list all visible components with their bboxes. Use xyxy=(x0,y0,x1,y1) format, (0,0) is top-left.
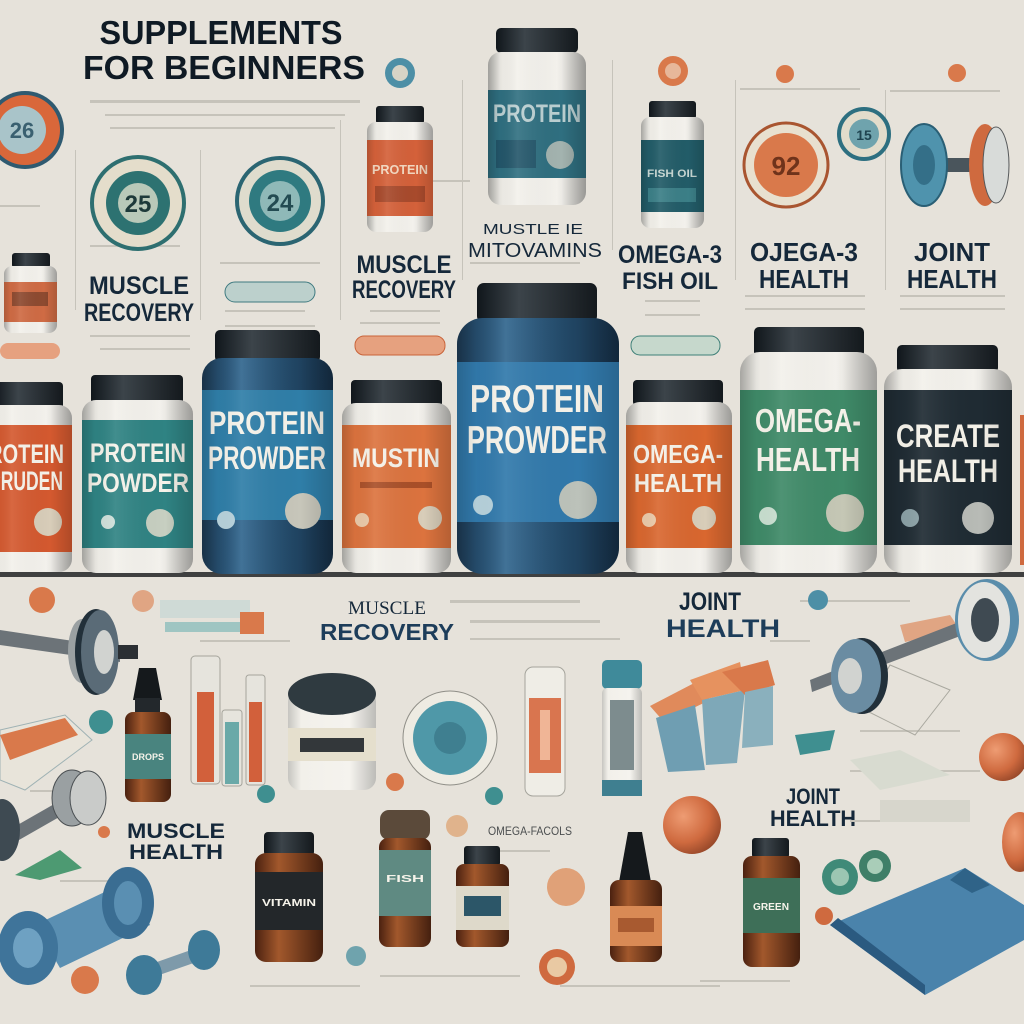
top jar: teal: FISH OIL xyxy=(647,168,697,180)
icon: test tubes xyxy=(191,656,265,786)
heading: muscle recovery 1 xyxy=(84,272,194,327)
heading: omega-3 fish oil: OMEGA-3 xyxy=(618,241,722,269)
bottle: tall green-grey xyxy=(379,810,431,947)
small decorative tokens xyxy=(0,587,960,994)
jar: omega health orange: OMEGA- xyxy=(633,439,723,469)
icon: tin xyxy=(288,673,376,790)
heading: joint health right lower: HEALTH xyxy=(770,806,856,831)
icon: fish oil packs xyxy=(650,660,775,772)
jar: protein powder large: PROWDER xyxy=(467,419,607,462)
heading: joint health right lower: JOINT xyxy=(786,784,840,809)
jar: mustin orange: MUSTIN xyxy=(352,443,440,473)
heading: joint health: JOINT xyxy=(914,237,990,267)
jar: omega health green: OMEGA- xyxy=(755,402,861,439)
icon: teal-capped tube xyxy=(602,660,642,796)
bottle: green label: GREEN xyxy=(753,902,789,913)
jar edge right xyxy=(1020,415,1024,565)
icon: green capsules xyxy=(822,850,891,895)
heading: muscle recovery 1: RECOVERY xyxy=(84,299,194,327)
heading: joint health right lower xyxy=(770,784,856,831)
heading: muscle recovery 2: RECOVERY xyxy=(352,276,456,304)
icon: badge teal small xyxy=(839,109,889,159)
bottle: dark brown jar: VITAMIN xyxy=(262,898,316,909)
jar: omega health orange xyxy=(626,380,732,573)
jar: protein powder blue: PROWDER xyxy=(208,440,326,476)
jar: protein orange left xyxy=(0,382,72,572)
heading: muscle health lower: MUSCLE xyxy=(127,820,225,843)
heading: muscle recovery 1: MUSCLE xyxy=(89,272,189,300)
heading: muscle health lower xyxy=(127,820,225,864)
fine print lower xyxy=(30,600,980,987)
icon: badge left edge: 26 xyxy=(10,118,34,143)
jar: omega health orange: HEALTH xyxy=(634,468,722,498)
icon: small top badges xyxy=(385,56,966,88)
small left jar xyxy=(4,253,57,333)
heading: omega-3 health: OJEGA-3 xyxy=(750,237,858,267)
bottle: dropper orange xyxy=(610,832,662,962)
heading: omega-3 health: HEALTH xyxy=(759,264,849,294)
icon: orange balls xyxy=(663,733,1024,872)
heading: joint health xyxy=(907,237,997,294)
jar: protein powder large: PROTEIN xyxy=(470,378,604,421)
heading: multivitamins: MITOVAMINS xyxy=(468,240,602,262)
jar: mustin orange xyxy=(342,380,451,573)
heading: multivitamins xyxy=(468,221,602,262)
icon: dropper bottle brown xyxy=(125,668,171,802)
jar: protein powder blue xyxy=(202,330,333,574)
title: SUPPLEMENTS xyxy=(100,14,342,51)
title: FOR BEGINNERS xyxy=(83,49,365,86)
icon: badge orange 92: 92 xyxy=(772,151,800,181)
icon: orange tube xyxy=(525,667,565,796)
icon: blue roll dumbbell xyxy=(0,867,154,985)
heading: joint health lower: HEALTH xyxy=(666,615,780,643)
jar: protein powder teal: POWDER xyxy=(87,468,189,498)
title xyxy=(83,14,365,86)
heading: omega-3 fish oil: FISH OIL xyxy=(622,268,718,295)
icon: small blue dumbbell xyxy=(126,930,220,995)
top jar: teal xyxy=(641,101,704,228)
icon: dumbbell left xyxy=(0,770,106,861)
heading: omega-3 health xyxy=(750,237,858,294)
icon: dropper bottle brown: DROPS xyxy=(132,752,164,762)
pill tags xyxy=(0,282,720,359)
jar: protein powder blue: PROTEIN xyxy=(209,405,325,441)
icon: badge left edge xyxy=(0,91,64,169)
jar: omega health green xyxy=(740,327,877,573)
heading: joint health lower xyxy=(666,588,780,643)
jar: omega health green: HEALTH xyxy=(756,441,860,478)
jar: protein powder teal xyxy=(82,375,193,573)
top jar: protein: PROTEIN xyxy=(493,100,581,128)
icon: badge 24 xyxy=(237,158,323,244)
heading: muscle health lower: HEALTH xyxy=(129,841,223,864)
icon: badge orange 92 xyxy=(744,123,828,207)
icon: teal disc xyxy=(403,691,497,785)
bottle: dark brown jar xyxy=(255,832,323,962)
heading: omega-3 fish oil xyxy=(618,241,722,295)
heading: muscle recovery lower: MUSCLE xyxy=(348,598,426,619)
jar: protein powder large xyxy=(457,283,619,574)
icon: barbell top left xyxy=(0,609,138,695)
heading: multivitamins: MUSTLE IE xyxy=(483,221,583,238)
bottle: small brown xyxy=(456,846,509,947)
heading: muscle recovery lower xyxy=(320,598,454,645)
subtitle fine print xyxy=(0,60,1005,350)
shelf xyxy=(0,572,1024,577)
icon: badge 24: 24 xyxy=(267,190,294,217)
icon: badge teal small: 15 xyxy=(856,127,872,143)
heading: joint health lower: JOINT xyxy=(679,588,741,616)
heading: muscle recovery 2 xyxy=(352,251,456,304)
heading: muscle recovery lower: RECOVERY xyxy=(320,619,454,645)
top jar: orange: PROTEIN xyxy=(372,162,428,177)
top jar: protein xyxy=(488,28,586,205)
top jar: orange xyxy=(367,106,433,232)
icon: badge 25: 25 xyxy=(125,191,151,218)
jar: create health dark: CREATE xyxy=(896,418,1000,454)
jar: create health dark xyxy=(884,345,1012,573)
bottle: green label xyxy=(743,838,800,967)
jar: create health dark: HEALTH xyxy=(898,453,998,489)
caption: omega acids: OMEGA-FACOLS xyxy=(488,824,572,838)
heading: joint health: HEALTH xyxy=(907,264,997,294)
bottle: tall green-grey: FISH xyxy=(386,874,424,885)
icon: top dumbbell xyxy=(901,124,1009,206)
heading: muscle recovery 2: MUSCLE xyxy=(356,251,452,279)
icon: badge 25 xyxy=(92,157,184,249)
jar: protein powder teal: PROTEIN xyxy=(90,438,186,468)
icon: dumbbell right xyxy=(810,579,1019,714)
icon: exercise mat xyxy=(830,868,1024,995)
